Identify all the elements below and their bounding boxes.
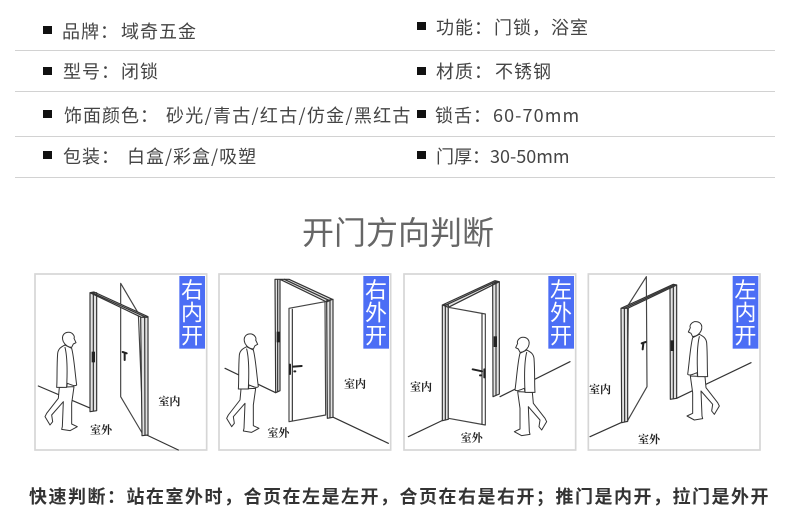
door frame bbox=[90, 292, 148, 436]
bullet bbox=[43, 67, 52, 75]
material label: 材质： bbox=[436, 58, 493, 84]
latch value: 60-70mm bbox=[493, 102, 580, 128]
tag: right inward: 右 bbox=[181, 273, 203, 305]
tag: left inward: 内 bbox=[734, 296, 756, 328]
tag: right outward bbox=[363, 273, 389, 350]
door handle bbox=[642, 342, 646, 349]
door handle bbox=[473, 369, 484, 377]
bullet bbox=[417, 110, 426, 118]
finish value: 砂光/青古/红古/仿金/黑红古 bbox=[166, 102, 412, 128]
bullet bbox=[417, 22, 426, 30]
spec row: brand and function bbox=[43, 14, 589, 44]
lock plate bbox=[672, 341, 673, 350]
packaging label: 包装： bbox=[63, 143, 120, 169]
floor lines bbox=[408, 362, 570, 437]
quick judgement note: 快速判断：站在室外时，合页在左是左开，合页在右是右开；推门是内开，拉门是外开 bbox=[29, 483, 770, 509]
open door bbox=[289, 302, 326, 422]
brand label: 品牌： bbox=[62, 18, 119, 44]
room label: outdoor: 室外 bbox=[461, 429, 484, 445]
tag: left outward: 外 bbox=[550, 296, 572, 328]
floor lines bbox=[590, 363, 751, 437]
tag: right inward: 内 bbox=[181, 296, 203, 328]
door thickness value: 30-50mm bbox=[490, 143, 570, 169]
room label: outdoor: 室外 bbox=[638, 431, 661, 447]
tag: left outward: 左 bbox=[550, 273, 572, 305]
bullet bbox=[417, 67, 426, 75]
panel: left inward bbox=[588, 273, 761, 451]
person bbox=[227, 334, 259, 432]
panel: right outward bbox=[218, 273, 392, 451]
lock plate bbox=[495, 337, 496, 346]
tag: left outward bbox=[548, 273, 574, 350]
door handle bbox=[123, 352, 127, 360]
floor lines bbox=[225, 368, 388, 443]
tag: left inward: 左 bbox=[734, 273, 756, 305]
function label: 功能： bbox=[436, 14, 493, 40]
tag: left inward: 开 bbox=[734, 318, 756, 350]
panel: right inward bbox=[34, 273, 208, 451]
lock plate bbox=[93, 353, 94, 361]
room label: outdoor: 室外 bbox=[267, 425, 290, 441]
room label: indoor: 室内 bbox=[589, 381, 611, 397]
person bbox=[45, 332, 77, 431]
model value: 闭锁 bbox=[121, 58, 159, 84]
door frame bbox=[275, 279, 333, 418]
finish label: 饰面颜色： bbox=[64, 102, 159, 128]
spec row: packaging and door thickness bbox=[43, 143, 570, 169]
bullet bbox=[43, 110, 52, 118]
room label: indoor: 室内 bbox=[344, 375, 366, 391]
room label: indoor: 室内 bbox=[410, 379, 432, 395]
spec row: finish colours and latch bbox=[43, 102, 580, 128]
packaging value: 白盒/彩盒/吸塑 bbox=[127, 143, 257, 169]
room label: outdoor: 室外 bbox=[90, 421, 113, 437]
door frame bbox=[621, 284, 677, 423]
open door bbox=[627, 277, 647, 422]
material value: 不锈钢 bbox=[495, 58, 552, 84]
person bbox=[514, 337, 547, 436]
brand value: 域奇五金 bbox=[121, 18, 197, 44]
title: 开门方向判断 bbox=[302, 208, 494, 254]
tag: right inward bbox=[179, 273, 205, 350]
bullet bbox=[43, 151, 52, 159]
tag: right inward: 开 bbox=[181, 318, 203, 350]
bullet bbox=[43, 26, 52, 34]
panel: left outward bbox=[403, 273, 576, 451]
door frame bbox=[442, 281, 499, 421]
open door bbox=[448, 307, 485, 425]
tag: left outward: 开 bbox=[550, 318, 572, 350]
lock plate bbox=[278, 333, 279, 341]
door handle bbox=[290, 365, 302, 374]
open door bbox=[121, 283, 143, 435]
tag: left inward bbox=[733, 273, 758, 350]
latch label: 锁舌： bbox=[435, 102, 492, 128]
room label: indoor: 室内 bbox=[158, 393, 180, 409]
door thickness label: 门厚： bbox=[436, 143, 490, 169]
floor lines bbox=[38, 386, 178, 450]
person bbox=[687, 322, 719, 420]
spec row: model and material bbox=[43, 58, 552, 84]
function value: 门锁，浴室 bbox=[494, 14, 589, 40]
tag: right outward: 开 bbox=[365, 318, 387, 350]
bullet bbox=[417, 151, 426, 159]
tag: right outward: 外 bbox=[365, 296, 387, 328]
model label: 型号： bbox=[63, 58, 120, 84]
tag: right outward: 右 bbox=[365, 273, 387, 305]
